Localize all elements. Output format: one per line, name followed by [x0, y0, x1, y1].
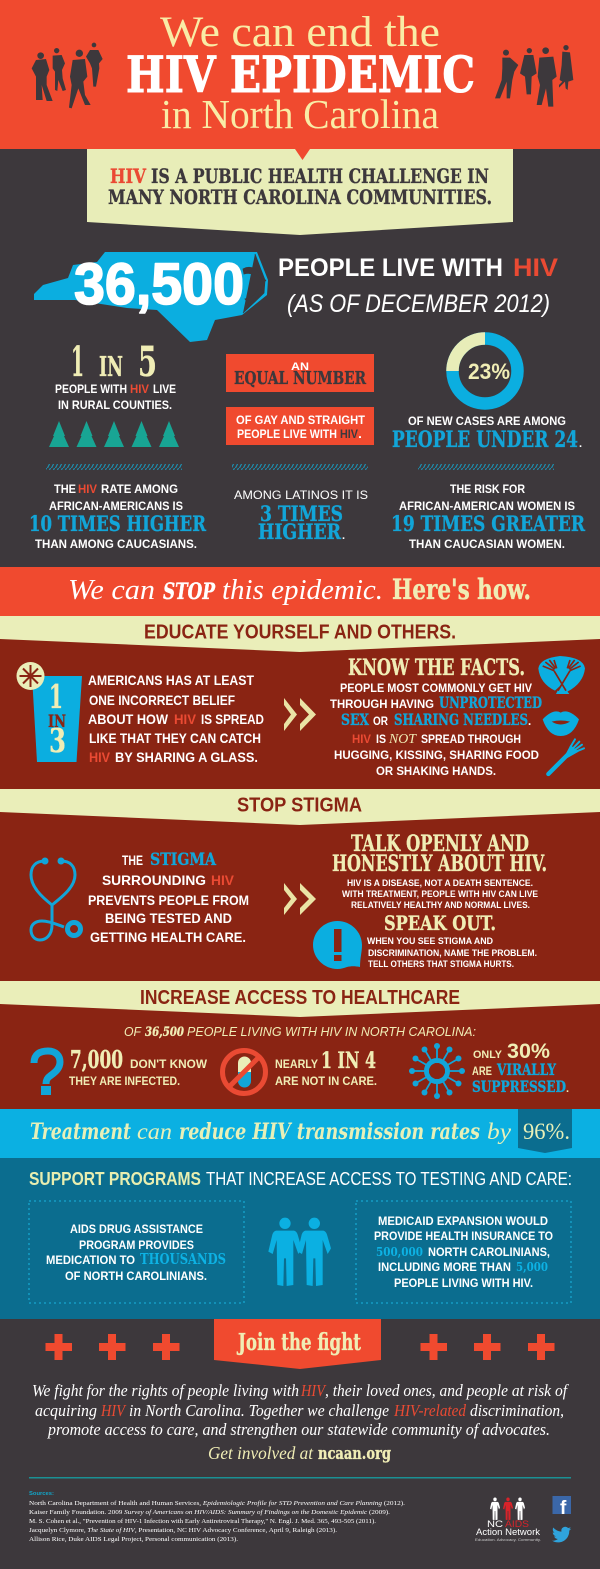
text: incorrect belief: ONE INCORRECT BELIEF [89, 693, 235, 708]
text: talk openly [332, 831, 547, 910]
icon: people silhouettes left [32, 43, 103, 108]
panel: stop stigma [0, 789, 600, 981]
text: know the facts: OR [373, 716, 389, 728]
text: know the facts: . [528, 716, 531, 728]
stat: 1 in 4: NEARLY [275, 1059, 318, 1071]
panel: 1 in 5: HIV [130, 384, 149, 396]
banner: we can stop this epidemic: STOP [163, 579, 216, 605]
callout: public health challenge: IS A PUBLIC HEALTH CHALLENGE IN [151, 164, 489, 188]
box: Medicaid expansion [356, 1201, 571, 1303]
text: know the facts: OR SHAKING HANDS. [376, 766, 496, 778]
icon: glass 1 in 3: IN [48, 712, 66, 732]
callout: public health challenge: MANY NORTH CAROLINA COMMUNITIES. [108, 185, 492, 209]
panel: equal number [226, 354, 374, 445]
icon: no pill [222, 1050, 266, 1094]
banner: treatment: by [487, 1119, 512, 1144]
box: AIDS drug assistance [29, 1201, 244, 1303]
text: sources: M. S. Cohen et al., "Prevention of HIV-1 Infection with Early Antiretroviral Therapy," N. Engl. J. Med. 365, 493-505 (2011). [29, 1518, 376, 1525]
panel: 1 in 5: LIVE [153, 384, 176, 396]
box: Medicaid expansion: 5,000 [516, 1259, 548, 1274]
dividers [46, 464, 554, 470]
text: sources: Kaiser Family Foundation. 2009 Survey of Americans on HIV/AIDS: Summary of Findings on the Domestic Epidemic (2009). [29, 1509, 390, 1516]
arrow: double chevron [284, 698, 316, 731]
text: know the facts: SHARING NEEDLES [394, 710, 528, 729]
donut chart [452, 338, 518, 404]
title: We can end the [160, 9, 440, 56]
box: AIDS drug assistance: THOUSANDS [140, 1251, 226, 1268]
stat: 7,000: DON'T KNOW [130, 1059, 207, 1071]
icon: glass 1 in 3: 1 [49, 677, 63, 716]
stat: 1 in 4: ARE NOT IN CARE. [275, 1076, 377, 1088]
callout: public health challenge: HIV [110, 164, 146, 188]
icon: twitter [552, 1527, 571, 1542]
panel: 23 percent donut: OF NEW CASES ARE AMONG [408, 416, 566, 428]
text: get involved [208, 1443, 391, 1464]
text: get involved: ncaan.org [318, 1444, 391, 1464]
text: the stigma: PREVENTS PEOPLE FROM [88, 893, 249, 908]
text: we fight paragraph: HIV [300, 1381, 327, 1400]
text: we fight paragraph [32, 1381, 569, 1439]
text: speak out: TELL OTHERS THAT STIGMA HURTS. [368, 959, 514, 969]
text: talk openly: HIV IS A DISEASE, NOT A DEATH SENTENCE. [347, 878, 533, 888]
text: speak out: WHEN YOU SEE STIGMA AND [367, 936, 493, 946]
title: in North Carolina [161, 91, 439, 137]
logo: NC AIDS Action Network: Action Network [476, 1527, 540, 1538]
panel: 1 in 5: 5 [138, 338, 157, 386]
panel: African-American rate: AFRICAN-AMERICANS IS [49, 501, 183, 513]
icon: people silhouettes right [495, 45, 573, 107]
panel: African-American rate: RATE AMONG [101, 484, 178, 496]
panel: 23 percent donut: . [579, 438, 582, 450]
coast detail [243, 254, 266, 313]
text: sources: Sources: [29, 1491, 54, 1497]
panel: African-American women [391, 484, 585, 551]
text: we fight paragraph: promote access to care, and strengthen our statewide community of advocates. [47, 1420, 550, 1439]
box: Medicaid expansion: PROVIDE HEALTH INSURANCE TO [374, 1231, 553, 1243]
stat: 1 in 4: 1 IN 4 [321, 1048, 376, 1074]
panel: equal number: . [358, 429, 362, 441]
text: we fight paragraph: discrimination, [470, 1401, 564, 1420]
heading: support programs: SUPPORT PROGRAMS [29, 1169, 201, 1189]
banner: we can stop this epidemic: Here's how. [392, 573, 531, 606]
icon: question mark [34, 1051, 60, 1095]
heading: educate [0, 616, 600, 652]
text: we fight paragraph: , their loved ones, and people at risk of [325, 1381, 569, 1400]
text: incorrect belief [88, 673, 264, 765]
text: speak out [367, 911, 537, 969]
stat: 30 percent: SUPPRESSED [472, 1077, 566, 1096]
title: HIV EPIDEMIC [126, 45, 475, 104]
panel: equal number: HIV [340, 429, 358, 441]
panel: 23 percent donut: 23% [468, 359, 510, 384]
logo: NC AIDS Action Network: AIDS [505, 1519, 529, 1530]
logo: NC AIDS Action Network: Education. Advocacy. Community. [475, 1537, 541, 1542]
panel: African-American rate: THE [54, 484, 76, 496]
text: we fight paragraph: acquiring [35, 1401, 97, 1420]
heading: increase access: INCREASE ACCESS TO HEALTHCARE [140, 987, 460, 1009]
banner: treatment: can [137, 1119, 172, 1144]
box: AIDS drug assistance: MEDICATION TO [46, 1255, 135, 1267]
text: incorrect belief: IS SPREAD [201, 712, 264, 727]
stat: 7,000: 7,000 [70, 1045, 123, 1074]
panel: African-American rate [29, 484, 206, 551]
banner: treatment: Treatment [30, 1119, 131, 1145]
icon: virus [409, 1043, 465, 1099]
banner: join the fight: Join the fight [237, 1329, 361, 1356]
icon: fork [548, 739, 584, 774]
text: know the facts: SPREAD THROUGH [421, 734, 521, 746]
people live with HIV: PEOPLE LIVE WITH [278, 254, 503, 282]
people live with HIV [278, 254, 558, 318]
people live with HIV: HIV [513, 254, 558, 282]
panel: Latinos: 3 TIMES [260, 502, 343, 527]
callout: 96 percent: 96%. [523, 1119, 570, 1144]
panel: 1 in 5 [49, 338, 179, 447]
icon: glass 1 in 3 [16, 662, 82, 762]
icon: hands [538, 656, 585, 694]
panel: equal number: PEOPLE LIVE WITH [237, 429, 337, 441]
panel: 23 percent donut [392, 338, 582, 453]
icon: North Carolina map [34, 252, 268, 342]
text: of 36,500: OF [124, 1024, 142, 1039]
text: know the facts: HUGGING, KISSING, SHARING FOOD [334, 750, 539, 762]
text: we fight paragraph: We fight for the rights of people living with [32, 1381, 299, 1400]
text: get involved: Get involved at [208, 1443, 314, 1463]
text: the stigma: THE [122, 853, 143, 868]
text: know the facts: SEX [341, 710, 369, 729]
panel: African-American women: THE RISK FOR [450, 484, 526, 496]
text: the stigma: HIV [211, 873, 234, 888]
heading: stop stigma: STOP STIGMA [237, 794, 362, 816]
text: know the facts: KNOW THE FACTS. [348, 655, 525, 681]
icon: trees [49, 421, 179, 447]
stat: 30 percent: . [566, 1083, 569, 1095]
text: know the facts: PEOPLE MOST COMMONLY GET HIV [340, 683, 532, 695]
banner: treatment [0, 1109, 600, 1158]
stat: 30 percent: ONLY [473, 1049, 503, 1061]
panel: African-American rate: HIV [78, 484, 97, 496]
panel: African-American women: AFRICAN-AMERICAN WOMEN IS [399, 501, 575, 513]
text: of 36,500: PEOPLE LIVING WITH HIV IN NORTH CAROLINA: [187, 1024, 476, 1039]
box: Medicaid expansion: INCLUDING MORE THAN [378, 1262, 511, 1274]
text: incorrect belief: AMERICANS HAS AT LEAST [88, 673, 255, 688]
people live with HIV: (AS OF DECEMBER 2012) [287, 290, 550, 318]
icon: facebook: f [560, 1498, 567, 1519]
panel: 1 in 5: IN RURAL COUNTIES. [58, 400, 172, 412]
box: AIDS drug assistance: PROGRAM PROVIDES [79, 1240, 194, 1252]
stat: 30 percent [472, 1040, 569, 1096]
logo: NC AIDS Action Network: NC [487, 1519, 503, 1530]
text: incorrect belief: HIV [174, 712, 196, 727]
banner: we can stop this epidemic: We can [68, 574, 155, 606]
panel: educate [0, 616, 600, 789]
stat: 30 percent: VIRALLY [496, 1060, 557, 1079]
panel: 1 in 5: 1 [71, 338, 84, 386]
text: know the facts [330, 655, 542, 778]
stat: 30 percent: 30% [507, 1040, 550, 1063]
text: incorrect belief: BY SHARING A GLASS. [115, 750, 258, 765]
text: the stigma [88, 850, 249, 945]
stat: 1 in 4 [275, 1048, 377, 1088]
icon: stethoscope [31, 858, 80, 940]
panel: African-American women: THAN CAUCASIAN WOMEN. [409, 539, 565, 551]
box: Medicaid expansion: PEOPLE LIVING WITH HIV. [394, 1278, 533, 1290]
text: know the facts: IS [376, 734, 386, 746]
heading: educate: EDUCATE YOURSELF AND OTHERS. [144, 622, 456, 644]
text: incorrect belief: HIV [89, 750, 110, 765]
panel: Latinos [234, 488, 368, 545]
banner: we can stop this epidemic [0, 567, 600, 616]
text: incorrect belief: LIKE THAT THEY CAN CATCH [89, 731, 261, 746]
icon: lips [543, 711, 579, 736]
callout: 96 percent [518, 1109, 572, 1153]
text: know the facts: THROUGH HAVING [330, 699, 434, 711]
panel: support programs [0, 1158, 600, 1319]
box: AIDS drug assistance: OF NORTH CAROLINIANS. [65, 1271, 207, 1283]
text: talk openly: TALK OPENLY AND [351, 831, 529, 857]
icons: plus signs [46, 1334, 554, 1360]
text: we fight paragraph: HIV-related [393, 1401, 466, 1420]
panel: equal number: AN [291, 361, 309, 373]
text: know the facts: NOT [388, 732, 417, 747]
box: Medicaid expansion: MEDICAID EXPANSION WOULD [378, 1216, 548, 1228]
text: sources [29, 1491, 405, 1543]
text: know the facts: HIV [352, 734, 371, 746]
text: speak out: DISCRIMINATION, NAME THE PROBLEM. [368, 948, 537, 958]
stat: 7,000: THEY ARE INFECTED. [69, 1076, 180, 1088]
panel: Latinos: AMONG LATINOS IT IS [234, 488, 368, 502]
text: sources: North Carolina Department of Health and Human Services, Epidemiologic Profile for STD Prevention and Care Planning (2012). [29, 1500, 405, 1507]
arrow: double chevron [284, 883, 316, 915]
banner: treatment: reduce HIV transmission rates [179, 1119, 480, 1145]
panel: header [0, 0, 600, 149]
text: the stigma: GETTING HEALTH CARE. [90, 930, 246, 945]
panel: Latinos: HIGHER [258, 520, 341, 545]
box: Medicaid expansion: 500,000 [376, 1244, 423, 1259]
text: talk openly: WITH TREATMENT, PEOPLE WITH HIV CAN LIVE [342, 889, 538, 899]
text: we fight paragraph: in North Carolina. Together we challenge [129, 1401, 389, 1420]
heading: support programs [29, 1169, 572, 1189]
box: Medicaid expansion: NORTH CAROLINIANS, [428, 1247, 550, 1259]
stat: 7,000 [69, 1045, 207, 1088]
callout: public health challenge [87, 149, 513, 235]
panel: African-American rate: THAN AMONG CAUCASIANS. [35, 539, 197, 551]
icon: glass 1 in 3: 3 [49, 721, 66, 760]
panel: Latinos: . [342, 530, 345, 542]
number: 36,500 [74, 252, 244, 317]
text: the stigma: BEING TESTED AND [105, 911, 232, 926]
panel: African-American rate: 10 TIMES HIGHER [29, 512, 206, 537]
logo: NC AIDS Action Network [475, 1498, 541, 1542]
text: we fight paragraph: HIV [100, 1401, 127, 1420]
banner: join the fight [214, 1319, 381, 1369]
text: sources: Allison Rice, Duke AIDS Legal Project, Personal communication (2013). [29, 1536, 238, 1543]
text: the stigma: STIGMA [150, 850, 216, 869]
banner: we can stop this epidemic: this epidemic. [222, 574, 383, 606]
text: sources: Jacquelyn Clymore, The State of HIV , Presentation, NC HIV Advocacy Conference, April 9, Raleigh (2013). [29, 1527, 337, 1534]
text: know the facts: UNPROTECTED [439, 693, 542, 712]
icon: two people [268, 1218, 331, 1286]
panel: equal number: OF GAY AND STRAIGHT [236, 415, 365, 427]
heading: increase access [0, 981, 600, 1017]
text: of 36,500: 36,500 [145, 1025, 184, 1040]
text: speak out: SPEAK OUT. [384, 911, 496, 935]
panel: equal number: EQUAL NUMBER [234, 368, 367, 389]
icon: speech bubble exclamation [313, 921, 362, 969]
panel: 36,500 statistic [34, 252, 558, 342]
text: incorrect belief: ABOUT HOW [88, 712, 168, 727]
stat: 30 percent: ARE [472, 1066, 492, 1078]
text: talk openly: RELATIVELY HEALTHY AND NORMAL LIVES. [351, 900, 530, 910]
panel: 1 in 5: PEOPLE WITH [55, 384, 127, 396]
icon: facebook [552, 1496, 571, 1519]
heading: stop stigma [0, 789, 600, 825]
box: AIDS drug assistance: AIDS DRUG ASSISTANCE [70, 1224, 203, 1236]
panel: increase access [0, 981, 600, 1109]
text: the stigma: SURROUNDING [102, 873, 206, 888]
title [126, 9, 475, 137]
panel: 1 in 5: IN [99, 352, 123, 383]
